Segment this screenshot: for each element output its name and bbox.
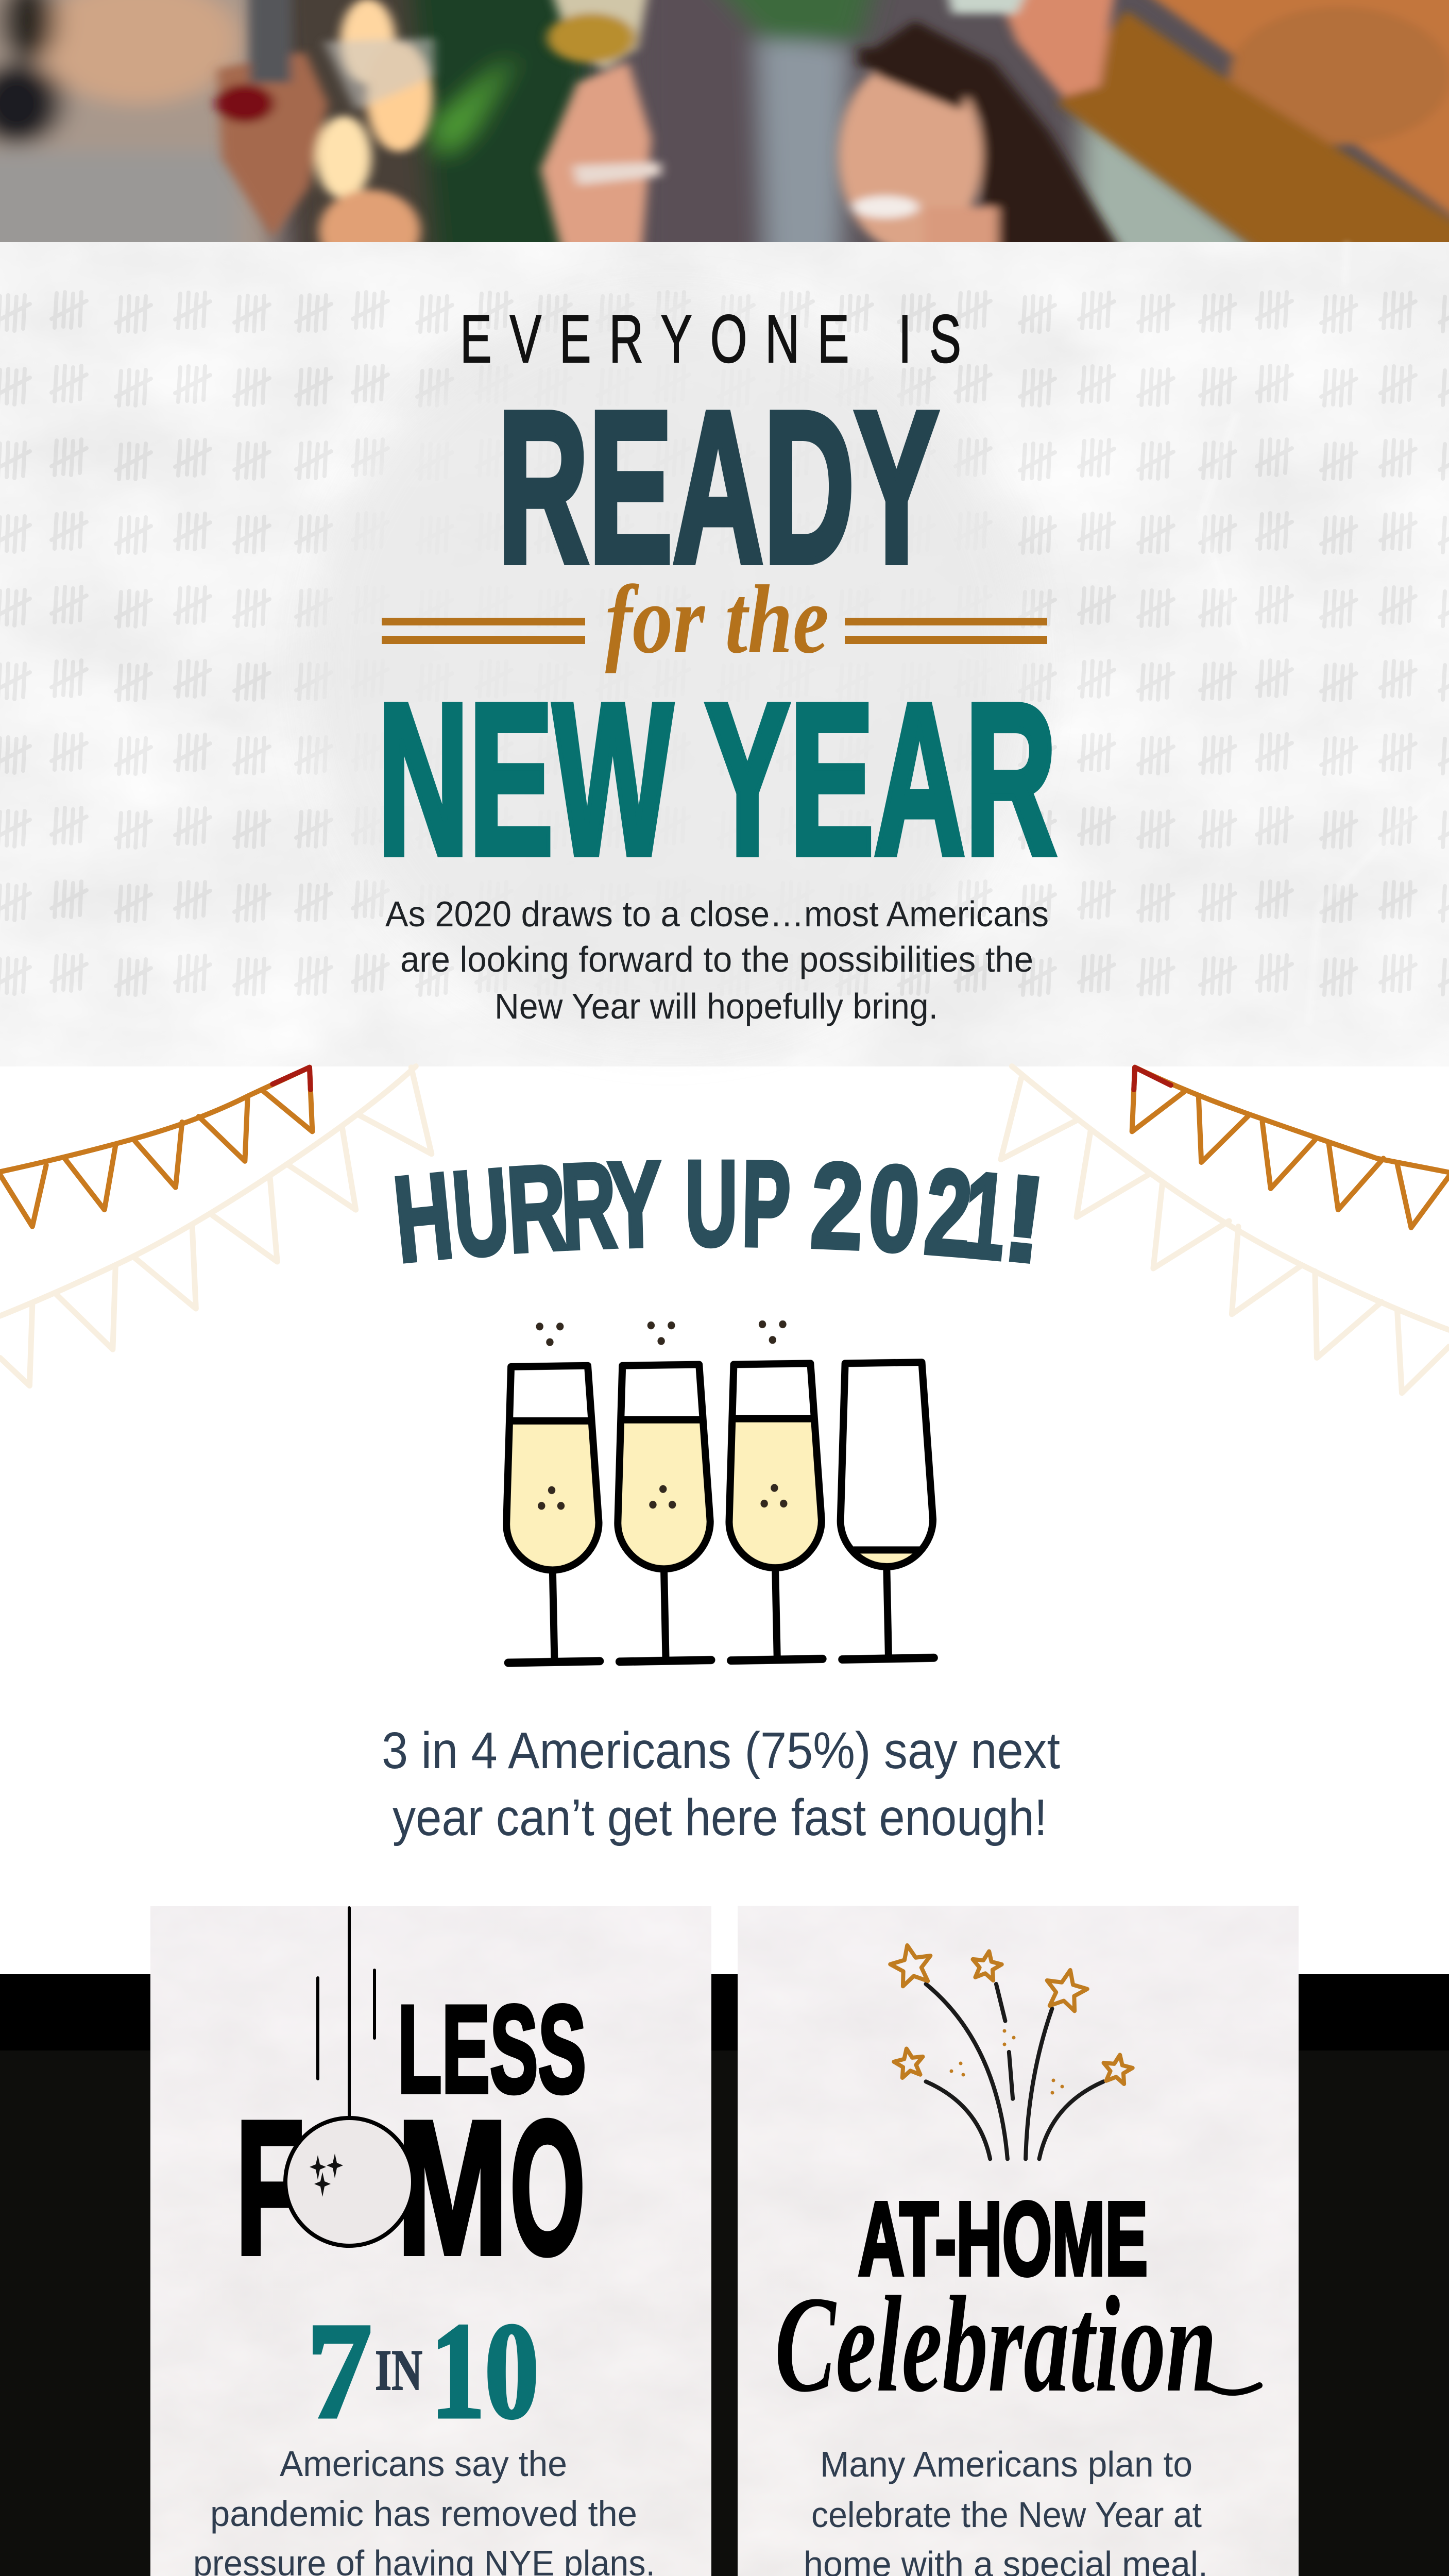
heading: HURRY UP 2021!: !: [997, 1149, 1051, 1289]
title rules and script: [382, 566, 1047, 674]
stat text: 3 in 4 Americans: 3 in 4 Americans (75%) say next: [382, 1722, 1060, 1780]
heading: HURRY UP 2021!: H: [388, 1147, 458, 1288]
heading: HURRY UP 2021!: R: [503, 1139, 570, 1278]
heading: HURRY UP 2021!: U: [685, 1136, 738, 1272]
flute 3: [729, 1320, 823, 1660]
icon: champagne flutes, 3 of 4 full: [506, 1320, 934, 1663]
title kicker: EVERYONE IS: [460, 301, 961, 377]
heading: HURRY UP 2021!: 0: [865, 1140, 924, 1278]
banners: pale bunting: [0, 1066, 1449, 1393]
stat: 7 in 10: IN: [375, 2338, 422, 2402]
script: Celebration: Celebration: [775, 2267, 1217, 2420]
intro paragraph: are looking forward to the possibilities the: [400, 939, 1033, 979]
body text: pandemic has removed the: [210, 2494, 637, 2534]
photo: friends toasting: [0, 0, 1449, 242]
banners: orange bunting: [0, 1067, 1449, 1228]
title: READY: READY: [498, 367, 939, 607]
tally mark pattern: [0, 286, 1449, 1007]
flute 2: [618, 1321, 711, 1662]
body text: Many Americans plan to: [820, 2444, 1192, 2484]
icon: fireworks: [887, 1941, 1134, 2159]
body text: celebrate the New Year at: [811, 2495, 1202, 2535]
panel: less FOMO card: [150, 1906, 711, 2576]
heading: LESS FOMO with ball drop: LESS: [398, 1980, 586, 2119]
body text: [193, 2444, 655, 2576]
intro paragraph: As 2020 draws to a close…most Americans: [385, 894, 1049, 934]
heading: AT-HOME: AT-HOME: [858, 2180, 1148, 2297]
heading: HURRY UP 2021!: P: [741, 1136, 792, 1273]
intro paragraph: [385, 894, 1049, 1026]
heading: LESS FOMO with ball drop: M: [397, 2081, 508, 2294]
heading: LESS FOMO with ball drop: O: [510, 2081, 585, 2294]
paper creases: [1200, 242, 1432, 1025]
heading: HURRY UP 2021!: [388, 1136, 1051, 1289]
photo: dark table with steak on board: [0, 1974, 1449, 2576]
panel: crumpled paper title: [0, 242, 1449, 1066]
stat: 7 in 10: 7: [307, 2295, 372, 2447]
intro paragraph: New Year will hopefully bring.: [495, 986, 938, 1026]
stat: 7 in 10: [307, 2295, 539, 2447]
soft fade behind the title: [309, 299, 1030, 1041]
heading: LESS FOMO with ball drop: [235, 1908, 586, 2294]
stat text: 3 in 4 Americans: year can’t get here fast enough!: [393, 1789, 1047, 1846]
panel: at-home celebration card: [738, 1906, 1299, 2576]
heading: HURRY UP 2021!: U: [448, 1142, 514, 1282]
body text: Americans say the: [280, 2444, 567, 2484]
heading: HURRY UP 2021!: 2: [808, 1137, 866, 1275]
stat text: 3 in 4 Americans: [382, 1722, 1060, 1846]
heading: HURRY UP 2021!: 2: [920, 1143, 977, 1282]
flute 4, empty: [841, 1362, 934, 1659]
body text: [804, 2444, 1208, 2576]
heading: HURRY UP 2021!: 1: [958, 1146, 1012, 1285]
heading: HURRY UP 2021!: R: [558, 1137, 619, 1275]
flute 1: [506, 1323, 600, 1663]
stat: 7 in 10: 10: [431, 2295, 539, 2447]
heading: HURRY UP 2021!: Y: [607, 1136, 663, 1273]
heading: LESS FOMO with ball drop: F: [235, 2081, 304, 2294]
title rules and script: for the: [605, 566, 829, 674]
